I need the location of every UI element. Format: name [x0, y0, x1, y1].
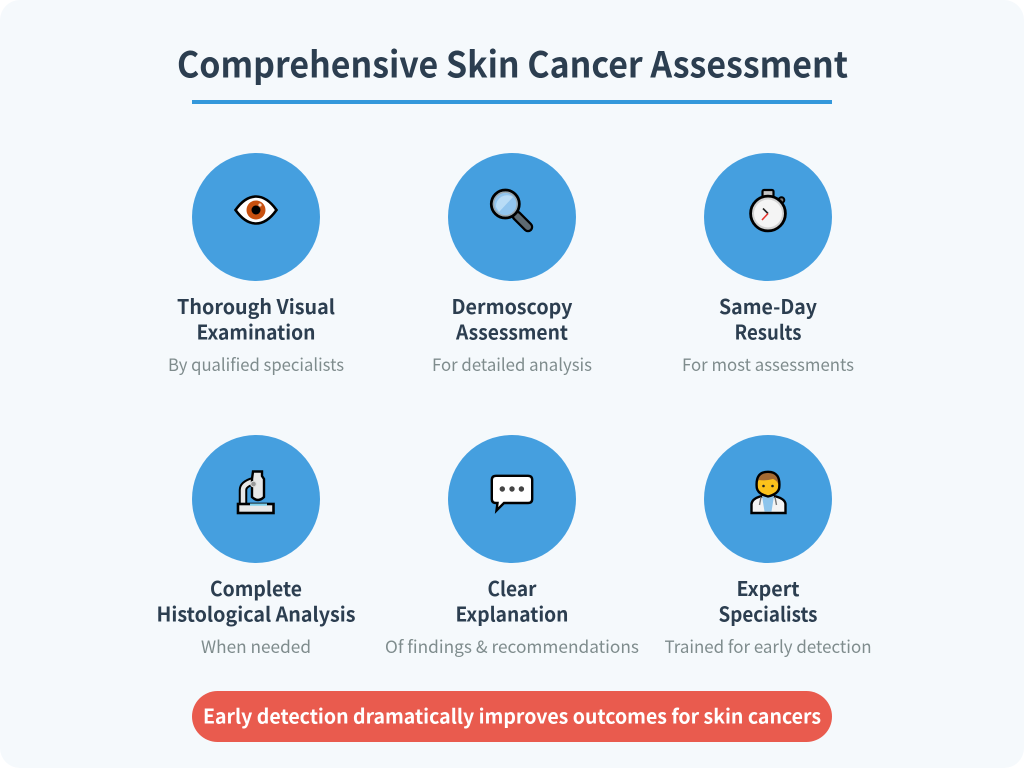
heading line 2: Explanation — [456, 598, 568, 628]
heading: Expert — [736, 573, 800, 602]
callout banner: Early detection dramatically improves outcomes for skin cancers — [203, 700, 821, 730]
card: same-day results — [682, 153, 854, 376]
heading line 2: Examination — [196, 316, 316, 346]
callout banner — [192, 691, 832, 742]
icon circle: eye — [192, 153, 320, 281]
card: dermoscopy assessment — [432, 153, 592, 376]
card: expert specialists — [664, 435, 872, 658]
heading line 2: Histological Analysis — [156, 598, 356, 628]
description: By qualified specialists — [168, 351, 344, 376]
card: thorough visual examination — [168, 153, 344, 376]
description: Of findings & recommendations — [385, 633, 639, 658]
heading: Thorough Visual — [177, 291, 335, 320]
description: Trained for early detection — [664, 633, 872, 658]
heading: Clear — [488, 573, 537, 602]
heading: Complete — [210, 573, 302, 602]
card: complete histological analysis — [156, 435, 356, 658]
description: For most assessments — [682, 351, 854, 376]
icon circle: speech bubble — [448, 435, 576, 563]
description: For detailed analysis — [432, 351, 592, 376]
title underline — [192, 100, 832, 104]
icon circle: microscope — [192, 435, 320, 563]
icon circle: stopwatch — [704, 153, 832, 281]
heading line 2: Specialists — [718, 598, 818, 628]
heading: Dermoscopy — [452, 291, 573, 320]
description: When needed — [201, 633, 311, 658]
icon circle: doctor — [704, 435, 832, 563]
title: Comprehensive Skin Cancer Assessment — [177, 36, 848, 88]
heading line 2: Assessment — [455, 316, 569, 346]
icon circle: magnifying glass — [448, 153, 576, 281]
card: clear explanation — [385, 435, 639, 658]
heading: Same-Day — [719, 291, 818, 320]
heading line 2: Results — [734, 316, 802, 346]
